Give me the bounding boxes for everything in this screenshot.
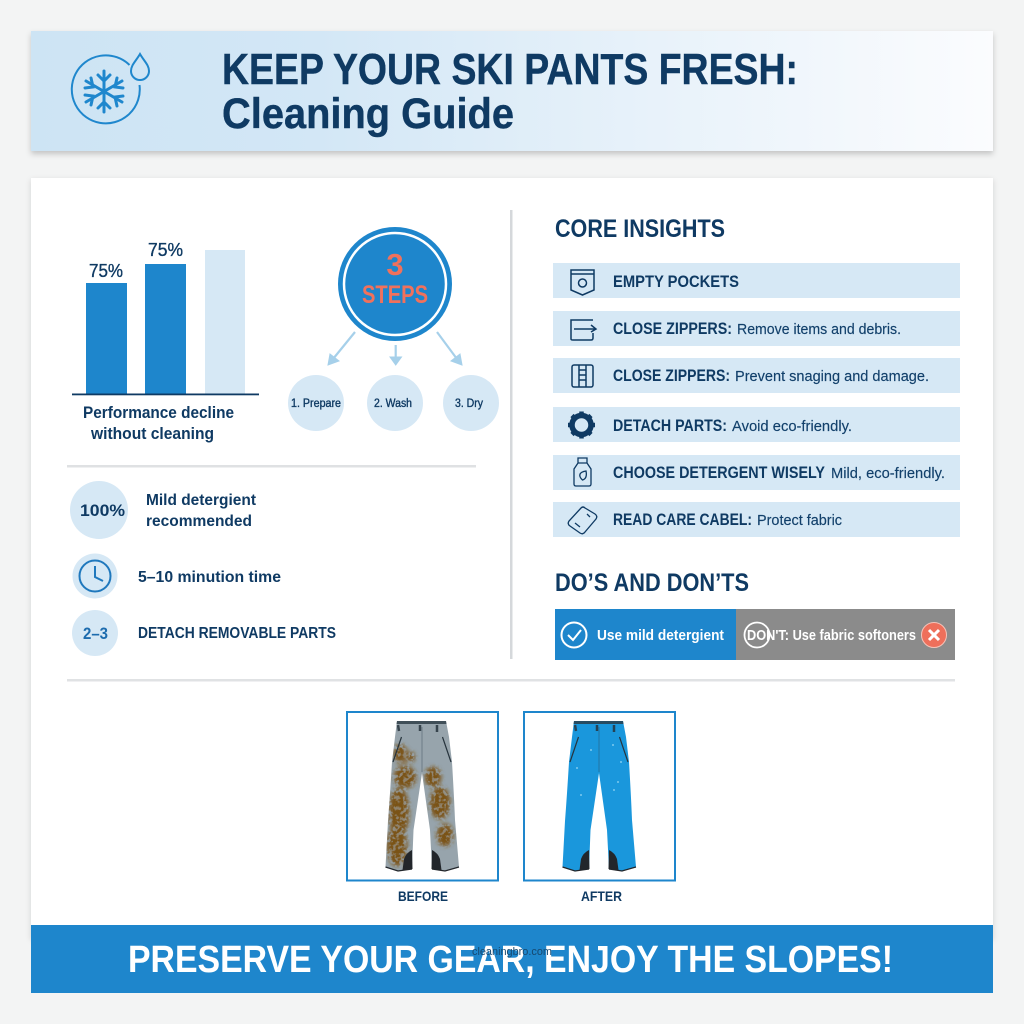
icon: check bbox=[562, 622, 586, 648]
icon: cross bbox=[922, 622, 946, 648]
step: prepare: 1. Prepare bbox=[291, 398, 341, 410]
insight row: empty pockets bbox=[553, 263, 960, 298]
stat: mild detergent: recommended bbox=[146, 513, 252, 530]
title: KEEP YOUR SKI PANTS FRESH: bbox=[222, 45, 798, 94]
clean blue pants bbox=[562, 721, 636, 871]
stat: mild detergent: 100% bbox=[80, 501, 125, 520]
insight row: care label bbox=[553, 502, 960, 537]
watermark: cleaningbro.com bbox=[472, 946, 552, 958]
stat: mild detergent: Mild detergient bbox=[146, 492, 256, 509]
stat: time bbox=[72, 554, 281, 598]
bar chart: performance decline: Performance decline bbox=[83, 404, 234, 422]
footer banner bbox=[31, 925, 993, 993]
insight row: remove items: Remove items and debris. bbox=[737, 321, 901, 338]
icon: snowflake and water drop bbox=[72, 54, 149, 123]
icon: pocket bbox=[571, 270, 594, 295]
icon: detergent bottle bbox=[574, 458, 591, 486]
insight row: prevent snagging: CLOSE ZIPPERS: bbox=[613, 367, 730, 385]
insight row: detach parts: Avoid eco-friendly. bbox=[732, 418, 852, 435]
heading: dos and donts: DO’S AND DON’TS bbox=[555, 569, 749, 597]
bar chart: performance decline bbox=[72, 240, 259, 443]
arrows bbox=[328, 332, 462, 365]
step: dry bbox=[443, 375, 499, 431]
stat: mild detergent bbox=[70, 481, 256, 539]
icon: gear bbox=[568, 412, 595, 438]
after photo bbox=[524, 712, 675, 904]
title bbox=[222, 45, 798, 138]
insight row: choose detergent bbox=[553, 455, 960, 490]
before photo bbox=[347, 712, 498, 904]
insight row: remove items bbox=[553, 311, 960, 346]
3 steps diagram bbox=[288, 227, 499, 431]
step: wash: 2. Wash bbox=[374, 398, 412, 410]
main panel bbox=[31, 178, 993, 938]
header banner bbox=[31, 31, 993, 151]
insight row: choose detergent: Mild, eco-friendly. bbox=[831, 465, 945, 482]
footer banner: PRESERVE YOUR GEAR, ENJOY THE SLOPES! bbox=[128, 939, 893, 981]
dirty grey pants bbox=[386, 721, 459, 871]
stat: removable parts: 2–3 bbox=[83, 625, 108, 643]
insight row: prevent snagging: Prevent snaging and damage. bbox=[735, 368, 929, 385]
bar chart: performance decline: 75% bbox=[148, 240, 183, 260]
icon: zipper pouch bbox=[571, 320, 596, 340]
stat: removable parts: DETACH REMOVABLE PARTS bbox=[138, 625, 336, 642]
insight row: detach parts: DETACH PARTS: bbox=[613, 417, 727, 435]
insight row: prevent snagging bbox=[553, 358, 960, 393]
steps badge: STEPS bbox=[362, 281, 428, 309]
heading: core insights: CORE INSIGHTS bbox=[555, 215, 725, 243]
icon: care label tag bbox=[568, 507, 597, 534]
insight row: care label: Protect fabric bbox=[757, 512, 842, 529]
steps badge bbox=[338, 227, 452, 341]
dont panel: DON'T: Use fabric softoners bbox=[747, 628, 916, 644]
label: after: AFTER bbox=[581, 888, 622, 904]
insight row: detach parts bbox=[553, 407, 960, 442]
bar chart: performance decline: without cleaning bbox=[90, 425, 214, 443]
label: before: BEFORE bbox=[398, 888, 448, 904]
dont panel bbox=[736, 609, 955, 660]
do panel: Use mild detergient bbox=[597, 628, 724, 644]
stat: removable parts bbox=[72, 610, 336, 656]
insight row: choose detergent: CHOOSE DETERGENT WISELY bbox=[613, 464, 825, 482]
stat: time: 5–10 minution time bbox=[138, 569, 281, 586]
title: Cleaning Guide bbox=[222, 90, 514, 138]
steps badge: 3 bbox=[386, 247, 404, 282]
insight row: care label: READ CARE CABEL: bbox=[613, 511, 752, 529]
step: wash bbox=[367, 375, 423, 431]
step: prepare bbox=[288, 375, 344, 431]
do panel bbox=[555, 609, 736, 660]
step: dry: 3. Dry bbox=[455, 398, 483, 410]
bar chart: performance decline: 75% bbox=[89, 261, 123, 281]
insight row: remove items: CLOSE ZIPPERS: bbox=[613, 320, 732, 338]
insight row: empty pockets: EMPTY POCKETS bbox=[613, 273, 739, 291]
icon: zipper bbox=[572, 365, 593, 387]
